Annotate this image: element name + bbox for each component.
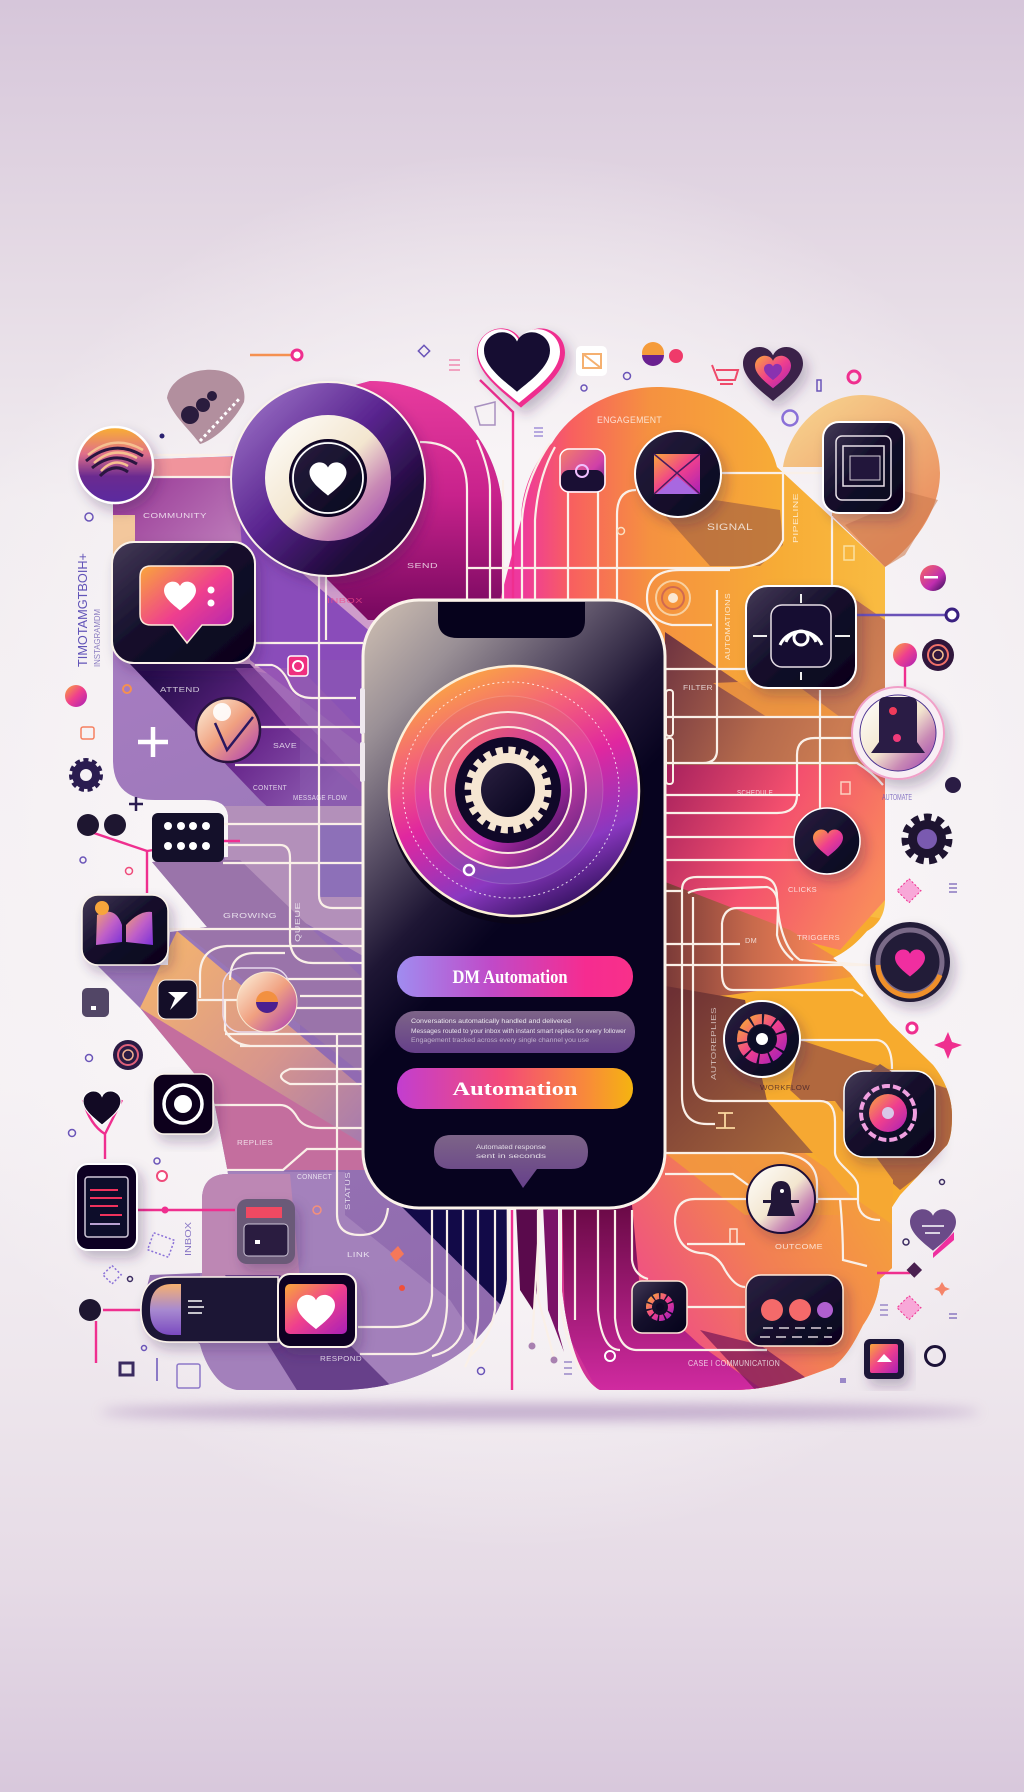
icon: check circle <box>196 698 260 762</box>
tiny labels: CONNECT <box>297 1174 332 1181</box>
icon: plus <box>138 727 168 757</box>
icon: heart tile <box>278 1274 356 1347</box>
icon: heart ring <box>870 922 950 1002</box>
speech bubble <box>434 1135 588 1188</box>
side caption <box>75 553 102 667</box>
icon: big heart circle <box>231 382 425 576</box>
tiny labels: REPLIES <box>237 1140 273 1147</box>
icon: cart <box>712 365 738 384</box>
stripes under phone <box>516 1205 564 1352</box>
tiny labels: WORKFLOW <box>760 1085 810 1092</box>
phone notch <box>438 602 585 638</box>
icon: orbs <box>642 342 683 366</box>
icon: small eye tile <box>632 1281 687 1333</box>
tiny labels: LINK <box>347 1252 370 1259</box>
tiny labels: QUEUE <box>295 902 302 942</box>
pill: description: Messages routed to your inbox with instant smart replies for every follower <box>411 1028 627 1035</box>
tiny labels: DM <box>745 938 757 945</box>
pill: DM Automation: DM Automation <box>452 967 568 988</box>
icon: three dots tile <box>746 1275 843 1346</box>
tiny labels: PIPELINE <box>793 493 800 543</box>
icon: top heart <box>477 328 565 408</box>
pill: description: Engagement tracked across every single channel you use <box>411 1037 589 1044</box>
icon: half pill <box>141 1277 278 1342</box>
icon: swirl <box>656 581 690 615</box>
tiny labels: CLICKS <box>788 887 817 894</box>
tiny labels: CONTENT <box>253 785 287 792</box>
panel: right orange network background <box>500 380 970 1400</box>
icon: spiral small <box>113 1040 143 1070</box>
icon: black dot <box>79 1299 101 1321</box>
tiny labels: AUTOREPLIES <box>711 1007 718 1080</box>
icon: sparkle <box>934 1282 950 1296</box>
tiny labels: INBOX <box>327 598 363 605</box>
icon: orb and spiral <box>893 639 954 671</box>
icon: app tile <box>864 1339 904 1379</box>
ground shadow <box>100 1403 980 1421</box>
icon: envelope circle <box>635 431 721 517</box>
icon: pin and sparkle <box>907 1023 962 1059</box>
icon: ring tile <box>153 1074 213 1134</box>
pink accent lines <box>83 355 945 1390</box>
side caption: INSTAGRAMDM <box>93 609 102 667</box>
icon: instagram mini <box>288 656 308 676</box>
tiny labels: ATTEND <box>160 687 200 694</box>
icon: arrow tile <box>158 980 197 1019</box>
side caption: TIMOTAMGTBOIH+ <box>75 553 90 667</box>
icon: ring <box>926 1346 944 1366</box>
tiny labels: TRIGGERS <box>797 935 840 942</box>
pill: Automation <box>397 1068 633 1109</box>
icon: wifi tile <box>746 586 856 688</box>
tiny labels: AUTOMATIONS <box>725 593 732 660</box>
icon: grey square <box>82 988 109 1017</box>
icon: bead drop <box>167 370 244 444</box>
icon: black heart <box>83 1091 121 1125</box>
icon: pin ring <box>946 609 958 621</box>
icon: gradient heart <box>910 1209 956 1258</box>
icon: small phone tile <box>76 1164 137 1250</box>
icon: monitor tile <box>823 422 904 513</box>
icon: heart speech tile <box>112 542 255 663</box>
tiny labels: STATUS <box>345 1172 352 1210</box>
tiny decorative marks <box>65 345 957 1383</box>
connector wires <box>153 440 892 1370</box>
tiny labels: SAVE <box>273 743 297 750</box>
icon: heart circle <box>794 808 860 874</box>
icon: twin dots <box>77 814 126 836</box>
icon: dark gear <box>906 818 948 860</box>
pill: description <box>395 1011 635 1053</box>
tiny labels <box>143 415 912 1368</box>
icon: small gradient tile <box>560 449 605 492</box>
tiny labels: AUTOMATE <box>882 793 912 802</box>
icon: envelope mini <box>576 346 607 376</box>
tiny labels: MESSAGE FLOW <box>293 795 347 802</box>
tiny labels: ENGAGEMENT <box>597 415 662 425</box>
icon: dots tile <box>152 813 224 862</box>
tiny labels: INBOX <box>184 1221 193 1256</box>
pill: Automation: Automation <box>452 1079 578 1100</box>
icon: purple heart <box>743 347 803 401</box>
icon: bow tile <box>82 895 168 965</box>
icon: flower tile <box>844 1064 935 1157</box>
pill: description: Conversations automatically handled and delivered <box>411 1018 571 1025</box>
icon: small squares <box>120 1358 200 1388</box>
tiny labels: COMMUNITY <box>143 513 207 520</box>
icon: hat circle <box>852 687 944 779</box>
speech bubble: sent in seconds <box>476 1153 547 1160</box>
panel: left purple network background <box>90 370 520 1400</box>
icon: card tile <box>237 1199 295 1264</box>
icon: orb <box>223 968 297 1032</box>
speech bubble: Automated response <box>476 1144 546 1151</box>
icon: pink pattern <box>897 879 921 1320</box>
gear disc on phone <box>388 666 644 924</box>
tiny labels: FILTER <box>683 685 713 692</box>
tiny labels: SCHEDULE <box>737 790 773 797</box>
tiny labels: RESPOND <box>320 1356 362 1363</box>
tiny labels: SEND <box>407 563 438 570</box>
phone <box>360 600 673 1208</box>
icon: diamond <box>907 1262 922 1278</box>
tiny labels: GROWING <box>223 913 277 920</box>
pill: DM Automation <box>397 956 633 997</box>
icon: wifi circle <box>77 427 153 503</box>
icon: hat badge <box>747 1165 815 1233</box>
panel: top right teardrop <box>783 395 940 567</box>
icon: gear circle <box>724 1001 800 1077</box>
tiny labels: CASE I COMMUNICATION <box>688 1359 780 1368</box>
tiny labels: SIGNAL <box>707 522 753 532</box>
tiny labels: OUTCOME <box>775 1244 823 1251</box>
icon: orb pink <box>920 565 946 591</box>
